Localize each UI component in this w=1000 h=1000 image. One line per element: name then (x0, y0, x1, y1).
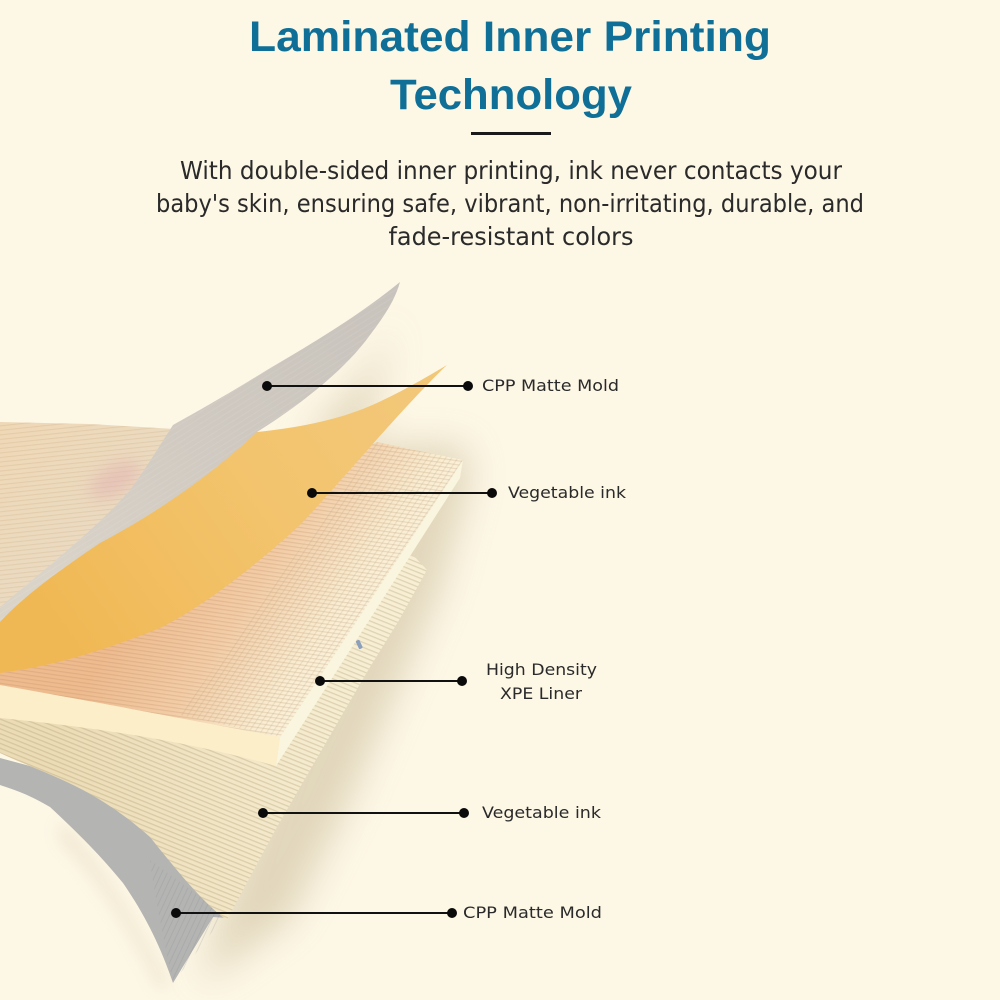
label: High Density XPE Liner (486, 660, 597, 703)
cast shadows (200, 300, 470, 985)
title divider (471, 132, 551, 135)
leader: CPP Matte Mold top (262, 381, 473, 391)
shadow below gray layer (60, 820, 170, 990)
leader: Vegetable ink bottom (258, 808, 469, 818)
layer: back printed sheet (0, 422, 220, 650)
layer: upper vegetable ink (0, 365, 447, 673)
description text: fade-resistant colors (388, 222, 634, 251)
blue mark (355, 640, 363, 649)
label: CPP Matte Mold bottom: CPP Matte Mold (463, 903, 602, 922)
layer: lower CPP matte film (0, 758, 227, 983)
description text: baby's skin, ensuring safe, vibrant, non-irritating, durable, and (156, 189, 864, 218)
leader: CPP Matte Mold bottom (171, 908, 457, 918)
description text (156, 156, 864, 251)
laminated layers illustration (0, 282, 470, 990)
title: Technology (390, 71, 632, 119)
description text: With double-sided inner printing, ink never contacts your (180, 156, 843, 185)
leader: XPE liner (315, 676, 467, 686)
title (249, 13, 771, 119)
leader: Vegetable ink top (307, 488, 497, 498)
layer: upper CPP matte film (0, 282, 400, 660)
layer: high density XPE liner (0, 442, 463, 766)
title: Laminated Inner Printing (249, 13, 771, 61)
label: High Density XPE Liner: High Density (486, 660, 597, 679)
layer: lower vegetable ink (0, 555, 427, 920)
label: Vegetable ink bottom: Vegetable ink (482, 803, 602, 822)
label: Vegetable ink top: Vegetable ink (508, 483, 627, 502)
label: High Density XPE Liner: XPE Liner (500, 684, 582, 703)
label: CPP Matte Mold top: CPP Matte Mold (482, 376, 619, 395)
